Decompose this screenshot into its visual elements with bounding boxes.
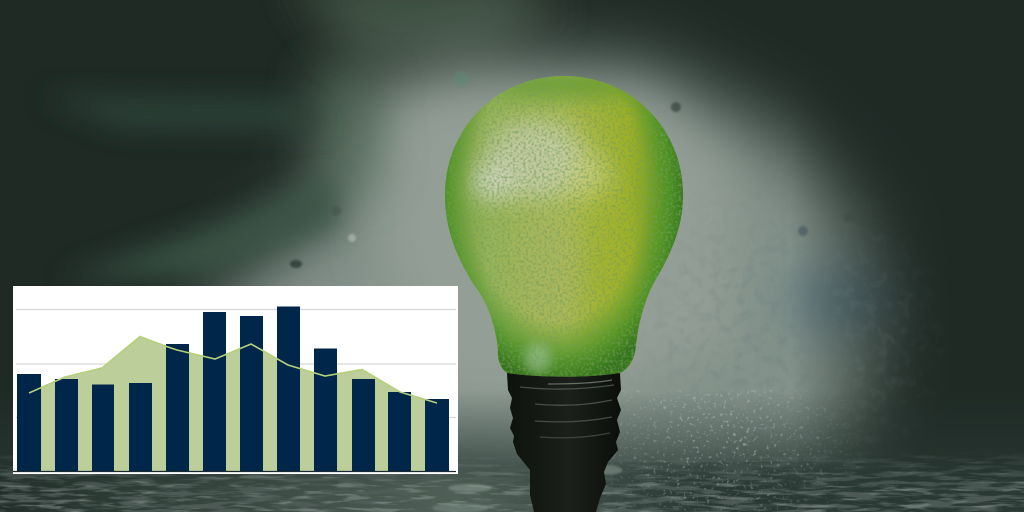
panel: chart card [13, 286, 458, 474]
screw base [507, 373, 621, 512]
bulb glass [440, 70, 690, 382]
icon: green light bulb [440, 70, 690, 512]
chart baseline [13, 470, 456, 472]
bar series [17, 306, 449, 471]
area series [29, 336, 437, 471]
chart gridlines [16, 310, 456, 418]
line series [29, 336, 437, 403]
floor: wet surface with water drops [0, 390, 1024, 512]
